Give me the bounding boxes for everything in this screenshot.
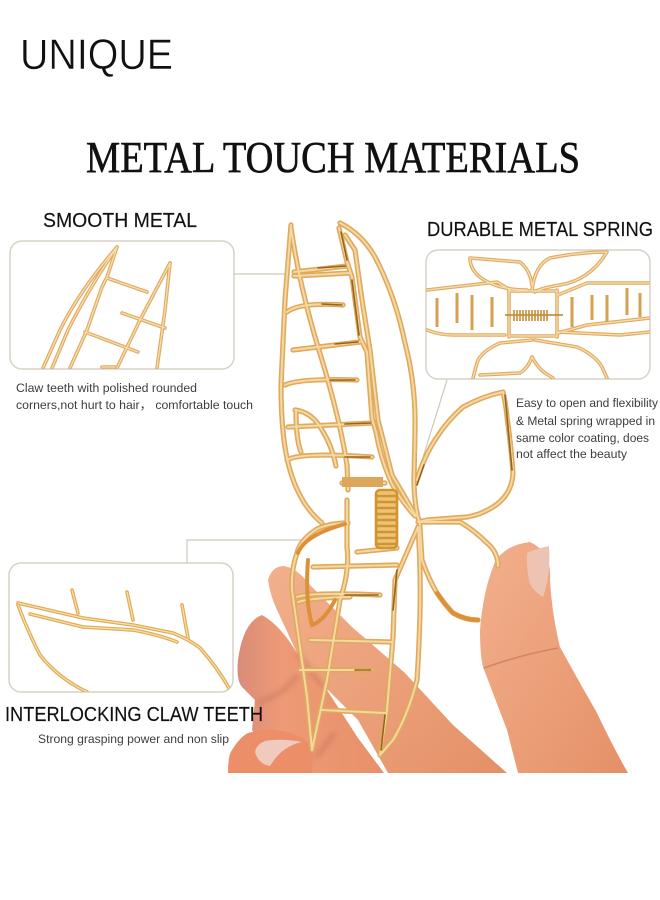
thumb nail	[527, 546, 549, 597]
caption: Strong grasping power and non slip	[38, 732, 229, 746]
thumb crease	[484, 648, 558, 668]
logo: UNIQUE	[20, 31, 173, 79]
detail photo	[427, 252, 650, 378]
detail photo	[18, 590, 230, 692]
coil spring	[376, 490, 397, 548]
index finger	[268, 566, 507, 773]
orange shaded metal	[307, 560, 335, 625]
lower fingernail	[255, 740, 302, 766]
gold butterfly hair claw	[281, 223, 513, 755]
thumb	[480, 542, 628, 773]
panel: smooth metal: corners,not hurt to hair， comfortable touch	[16, 398, 253, 412]
leader line	[420, 380, 447, 467]
leader line	[234, 273, 286, 275]
panel: interlocking claw teeth	[5, 540, 303, 746]
spring block	[342, 477, 383, 487]
middle finger	[238, 615, 384, 773]
panel: durable metal spring: & Metal spring wrapped in	[516, 414, 655, 428]
finger crease shadow	[257, 653, 335, 757]
leader line	[187, 540, 303, 563]
panel: durable metal spring: same color coating, does	[516, 431, 649, 445]
dark reflections	[318, 232, 512, 750]
caption: Easy to open and flexibility	[516, 396, 659, 410]
detail frame	[9, 563, 233, 692]
title: METAL TOUCH MATERIALS	[86, 133, 580, 182]
panel: smooth metal	[10, 210, 286, 412]
detail photo	[43, 247, 170, 368]
caption: Claw teeth with polished rounded	[16, 381, 197, 395]
detail frame	[426, 250, 650, 379]
panel: durable metal spring: not affect the beauty	[516, 447, 628, 461]
detail frame	[10, 241, 234, 369]
heading: SMOOTH METAL	[43, 210, 197, 232]
heading: INTERLOCKING CLAW TEETH	[5, 704, 263, 726]
lower finger	[228, 729, 313, 773]
panel: durable metal spring	[420, 219, 659, 467]
hand holding the clip	[228, 542, 628, 773]
